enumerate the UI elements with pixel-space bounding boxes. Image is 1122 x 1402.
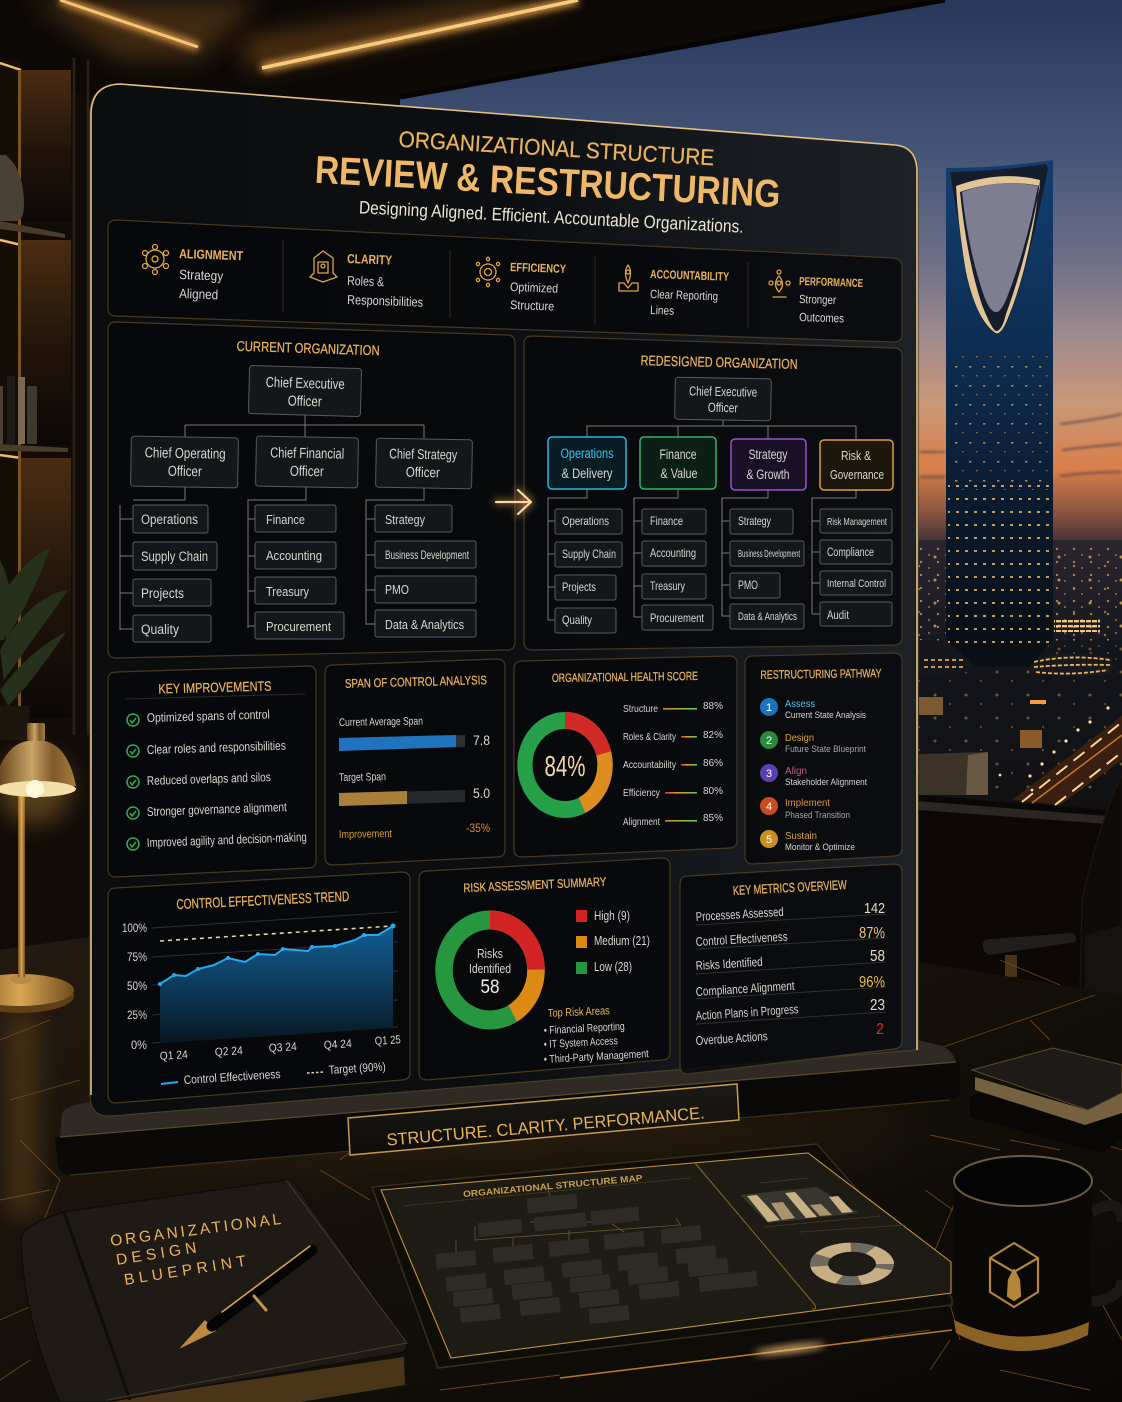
principle: performance: Stronger [799, 292, 836, 307]
legend: risk levels: Medium (21) [594, 934, 650, 948]
book title: DESIGN [115, 1239, 198, 1269]
principle: alignment: Strategy [179, 267, 224, 284]
list: improvements [127, 708, 307, 850]
box: risk and governance: Governance [830, 467, 884, 482]
step: design [760, 731, 866, 755]
box: COO: Officer [168, 464, 202, 480]
column: growth units: PMO [738, 578, 758, 592]
heading: key metrics: KEY METRICS OVERVIEW [732, 877, 848, 898]
column: strategy units: Strategy [385, 512, 425, 527]
step: design: Design [785, 732, 814, 744]
round lit building right [1030, 653, 1112, 677]
metric rows [623, 700, 723, 828]
nameplate [348, 1084, 739, 1155]
book title [109, 1211, 282, 1289]
column: delivery units: Supply Chain [562, 547, 616, 561]
donut centre label: Identified [469, 962, 511, 976]
metric rows: 86% [703, 757, 723, 769]
list: top risk areas: • Financial Reporting [544, 1021, 625, 1037]
tower podium glow [982, 652, 1024, 666]
panel: key improvements [108, 666, 316, 877]
column: value units [642, 509, 713, 630]
column: growth units [730, 509, 804, 629]
tablet bar chart [740, 1187, 859, 1223]
principle: alignment: Aligned [179, 286, 218, 302]
panel: five principles strip [108, 220, 902, 342]
column: finance units: Finance [266, 512, 305, 527]
round lit building left [918, 640, 972, 676]
lower-left block [919, 752, 988, 795]
chart legend [161, 1059, 386, 1087]
step: design: Future State Blueprint [785, 744, 866, 755]
list: improvements: Reduced overlaps and silos [147, 770, 271, 788]
bar: target span: 5.0 [473, 786, 490, 801]
panel: key metrics overview [680, 864, 902, 1074]
panel: organizational health score [514, 656, 737, 857]
metric rows: 2 [876, 1021, 884, 1038]
box: operations and delivery [548, 437, 626, 489]
step: align: Stakeholder Alignment [785, 777, 867, 788]
principle: performance [769, 270, 863, 325]
step: design: 2 [766, 735, 772, 747]
column: operations units: Quality [141, 622, 179, 637]
panel: risk assessment summary [419, 858, 670, 1080]
list: improvements: Optimized spans of control [147, 708, 270, 725]
line chart: 25% [127, 1010, 147, 1022]
box: CFO [256, 436, 358, 488]
column: value units: Finance [650, 514, 683, 528]
connectors: current chart [120, 415, 424, 630]
lit office block [1054, 618, 1100, 632]
metric rows: Compliance Alignment [695, 979, 795, 999]
pen [179, 1246, 312, 1349]
heading: key improvements: KEY IMPROVEMENTS [158, 679, 272, 696]
step: assess: 1 [766, 702, 772, 714]
box: redesigned CEO [675, 377, 771, 421]
acrylic base stand [55, 1040, 960, 1175]
metric rows: 85% [703, 812, 723, 824]
column: delivery units [555, 509, 622, 633]
line chart: Q1 24 [159, 1049, 189, 1063]
list: top risk areas: • Third-Party Management [543, 1048, 649, 1066]
metric rows: 58 [870, 948, 885, 965]
step: align: Align [785, 765, 807, 777]
icon: efficiency [476, 257, 500, 287]
column: governance units: Compliance [827, 547, 874, 559]
list: top risk areas [543, 1005, 649, 1066]
step: implement: 4 [766, 801, 772, 813]
heading: risk summary: RISK ASSESSMENT SUMMARY [463, 875, 607, 895]
window ledge and chair [918, 775, 1122, 1000]
vase [0, 155, 24, 221]
tablet donut [819, 1247, 885, 1281]
column: delivery units: Quality [562, 613, 592, 627]
stat: improvement: -35% [466, 823, 490, 835]
column: value units: Accounting [650, 546, 696, 560]
bar: current average span [339, 716, 490, 751]
line chart: Q4 24 [323, 1038, 353, 1052]
books stack right [970, 1048, 1122, 1153]
window: dusk sky [400, 0, 1122, 560]
title block [314, 127, 781, 237]
tablet chart boxes [435, 1193, 758, 1324]
step: sustain: Sustain [785, 830, 817, 842]
nameplate: STRUCTURE. CLARITY. PERFORMANCE. [386, 1103, 705, 1150]
main heading: REVIEW & RESTRUCTURING [314, 149, 781, 216]
principle: alignment: ALIGNMENT [179, 246, 243, 263]
books [0, 376, 37, 444]
column: growth units: Business Development [738, 548, 800, 560]
principle: efficiency: Optimized [510, 280, 558, 296]
box: strategy and growth: Strategy [748, 447, 788, 462]
box: CEO: Officer [287, 394, 322, 410]
panel: span of control analysis [325, 659, 505, 865]
step: sustain: 5 [766, 834, 772, 846]
metric rows: 87% [859, 925, 885, 942]
list: top risk areas: Top Risk Areas [548, 1005, 610, 1020]
column: governance units: Audit [827, 610, 850, 622]
step: implement: Phased Transition [785, 810, 850, 821]
column: value units: Treasury [650, 579, 685, 593]
principle: clarity: CLARITY [347, 251, 393, 268]
heading: span of control: SPAN OF CONTROL ANALYSIS [345, 673, 487, 691]
metric rows [695, 900, 885, 1048]
principle: clarity [310, 251, 424, 310]
icon: clarity [310, 251, 337, 282]
column: operations units: Operations [141, 512, 198, 527]
step: assess: Assess [785, 698, 815, 710]
box: CSO: Chief Strategy [389, 445, 457, 463]
tablet chart connectors [456, 1190, 681, 1252]
Kingdom Centre tower [946, 160, 1053, 666]
legend: risk levels: Low (28) [594, 960, 632, 974]
column: governance units: Risk Management [827, 516, 887, 528]
icon: accountability [619, 265, 638, 291]
column: delivery units: Operations [562, 514, 609, 528]
heading: current organization: CURRENT ORGANIZATION [236, 338, 380, 358]
metric rows: Structure [623, 703, 658, 715]
column: strategy units: PMO [385, 582, 409, 597]
subtitle: Designing Aligned. Efficient. Accountable Organizations. [359, 197, 744, 237]
box: CEO [248, 365, 362, 417]
legend: risk levels: High (9) [594, 909, 630, 923]
stat: improvement: Improvement [339, 828, 392, 841]
column: operations units: Projects [141, 586, 184, 601]
column: delivery units: Projects [562, 580, 596, 594]
box: CSO: Officer [406, 464, 440, 480]
panel: current organization [108, 322, 515, 658]
metric rows: Efficiency [623, 787, 661, 799]
column: finance units [255, 505, 344, 639]
principle: accountability: Clear Reporting [650, 287, 718, 303]
icon: performance [769, 270, 790, 297]
bar: target span [339, 771, 490, 806]
metric rows: 88% [703, 700, 723, 712]
line chart: Q2 24 [214, 1045, 244, 1059]
box: operations and delivery: & Delivery [562, 466, 613, 481]
bar: current average span: 7.8 [473, 733, 490, 748]
list: improvements: Improved agility and decision-making [147, 830, 307, 850]
column: operations units: Supply Chain [141, 549, 208, 564]
principle: alignment [142, 244, 243, 302]
principle: performance: Outcomes [799, 310, 844, 325]
chart legend: Control Effectiveness [183, 1067, 281, 1087]
city skyline lights [918, 540, 1122, 815]
principle: efficiency: Structure [510, 298, 554, 314]
step: implement [760, 797, 850, 821]
legend: risk levels [576, 909, 650, 974]
ceiling with gold light strips [0, 0, 945, 98]
step: align [760, 764, 867, 788]
principle: clarity: Roles & [347, 273, 385, 289]
box: redesigned CEO: Chief Executive [689, 383, 757, 400]
column: strategy units: Business Development [385, 548, 469, 562]
heading: pathway: RESTRUCTURING PATHWAY [760, 666, 882, 682]
column: strategy units: Data & Analytics [385, 617, 464, 632]
list: improvements: Clear roles and responsibilities [147, 739, 286, 757]
panel: restructuring pathway [745, 653, 902, 864]
principle: clarity: Responsibilities [347, 292, 424, 310]
box: operations and delivery: Operations [560, 446, 614, 461]
metric rows: 96% [859, 974, 885, 991]
box: finance and value [640, 437, 716, 489]
donut centre label: Risks [477, 947, 503, 961]
metric rows: 80% [703, 785, 723, 797]
bar: current average span: Current Average Span [339, 716, 423, 729]
stat: improvement [339, 823, 490, 841]
line chart: 75% [127, 952, 147, 964]
bookshelf on left wall [0, 58, 88, 735]
box: risk and governance [820, 440, 893, 490]
metric rows: 23 [870, 997, 885, 1014]
blueprint book [21, 1180, 407, 1402]
metric rows: 142 [864, 900, 885, 917]
connectors: redesigned chart [548, 420, 856, 620]
book title: ORGANIZATIONAL [109, 1211, 282, 1250]
coffee mug [953, 1156, 1122, 1351]
glow behind board [80, 1106, 920, 1154]
metric rows: Overdue Actions [695, 1029, 768, 1048]
eyebrow heading: ORGANIZATIONAL STRUCTURE [398, 127, 715, 170]
column: strategy units [375, 505, 476, 637]
box: CSO [376, 438, 472, 489]
glass board panel [90, 84, 918, 1116]
step: align: 3 [766, 768, 772, 780]
icon: alignment [142, 244, 168, 274]
line chart: Q3 24 [268, 1041, 298, 1055]
metric rows: Processes Assessed [695, 905, 784, 924]
heading: health score: ORGANIZATIONAL HEALTH SCORE [552, 669, 698, 685]
bar: target span: Target Span [339, 771, 386, 784]
step: sustain: Monitor & Optimize [785, 842, 855, 853]
line chart: Q1 25 [374, 1034, 401, 1048]
chart legend: Target (90%) [328, 1059, 386, 1077]
box: CEO: Chief Executive [265, 375, 345, 393]
column: governance units [820, 509, 892, 626]
box: CFO: Officer [290, 464, 324, 480]
step: implement: Implement [785, 797, 830, 809]
donut centre label: 58 [480, 977, 500, 998]
donut centre label [469, 947, 511, 998]
column: operations units [133, 505, 217, 642]
step: sustain [760, 830, 855, 853]
metric rows: Control Effectiveness [695, 930, 788, 949]
line chart: 0% [131, 1040, 147, 1052]
list: top risk areas: • IT System Access [544, 1035, 618, 1051]
metric rows: Action Plans in Progress [695, 1002, 799, 1023]
principle: efficiency [476, 257, 566, 314]
step: assess [760, 698, 866, 721]
tablet title: ORGANIZATIONAL STRUCTURE MAP [463, 1173, 643, 1199]
column: governance units: Internal Control [827, 578, 886, 590]
column: value units: Procurement [650, 611, 705, 625]
metric rows: 82% [703, 729, 723, 741]
list: improvements: Stronger governance alignment [147, 800, 287, 819]
metric rows: Roles & Clarity [623, 731, 677, 743]
box: strategy and growth [731, 439, 806, 490]
column: growth units: Strategy [738, 514, 771, 528]
step: assess: Current State Analysis [785, 710, 866, 721]
value: 84 percent: 84% [544, 751, 586, 783]
line chart: 100% [122, 923, 147, 935]
mug icon [990, 1243, 1038, 1307]
metric rows: Accountability [623, 759, 677, 771]
box: redesigned CEO: Officer [708, 400, 738, 415]
book title: BLUEPRINT [123, 1253, 248, 1289]
heading: trend: CONTROL EFFECTIVENESS TREND [176, 888, 350, 912]
tablet: organizational structure map [372, 1144, 952, 1368]
panel: control effectiveness trend [108, 872, 410, 1103]
box: COO [131, 436, 238, 488]
box: COO: Chief Operating [145, 445, 226, 463]
box: risk and governance: Risk & [841, 448, 871, 463]
column: growth units: Data & Analytics [738, 611, 797, 623]
principle: accountability: Lines [650, 303, 674, 318]
box: CFO: Chief Financial [270, 445, 344, 463]
box: finance and value: Finance [660, 447, 696, 462]
principle: accountability: ACCOUNTABILITY [650, 267, 729, 284]
principle: efficiency: EFFICIENCY [510, 260, 566, 276]
potted plant [0, 548, 68, 740]
line chart [122, 912, 401, 1063]
donut: risks identified [444, 920, 536, 1020]
desk lamp [0, 723, 76, 1013]
desk surface [0, 937, 1122, 1402]
donut: 84 percent [525, 720, 605, 810]
panel: redesigned organization [524, 336, 902, 650]
column: finance units: Treasury [266, 584, 309, 599]
heading: redesigned organization: REDESIGNED ORGANIZATION [640, 352, 798, 372]
box: strategy and growth: & Growth [746, 467, 790, 482]
line chart: 50% [127, 981, 147, 993]
column: finance units: Procurement [266, 619, 331, 634]
highway [1012, 716, 1122, 805]
arrow: current to redesigned [496, 490, 531, 514]
column: finance units: Accounting [266, 548, 322, 563]
metric rows: Risks Identified [695, 955, 763, 973]
principle: accountability [619, 265, 729, 318]
box: finance and value: & Value [660, 466, 698, 481]
principle: performance: PERFORMANCE [799, 276, 863, 290]
metric rows: Alignment [623, 816, 660, 828]
